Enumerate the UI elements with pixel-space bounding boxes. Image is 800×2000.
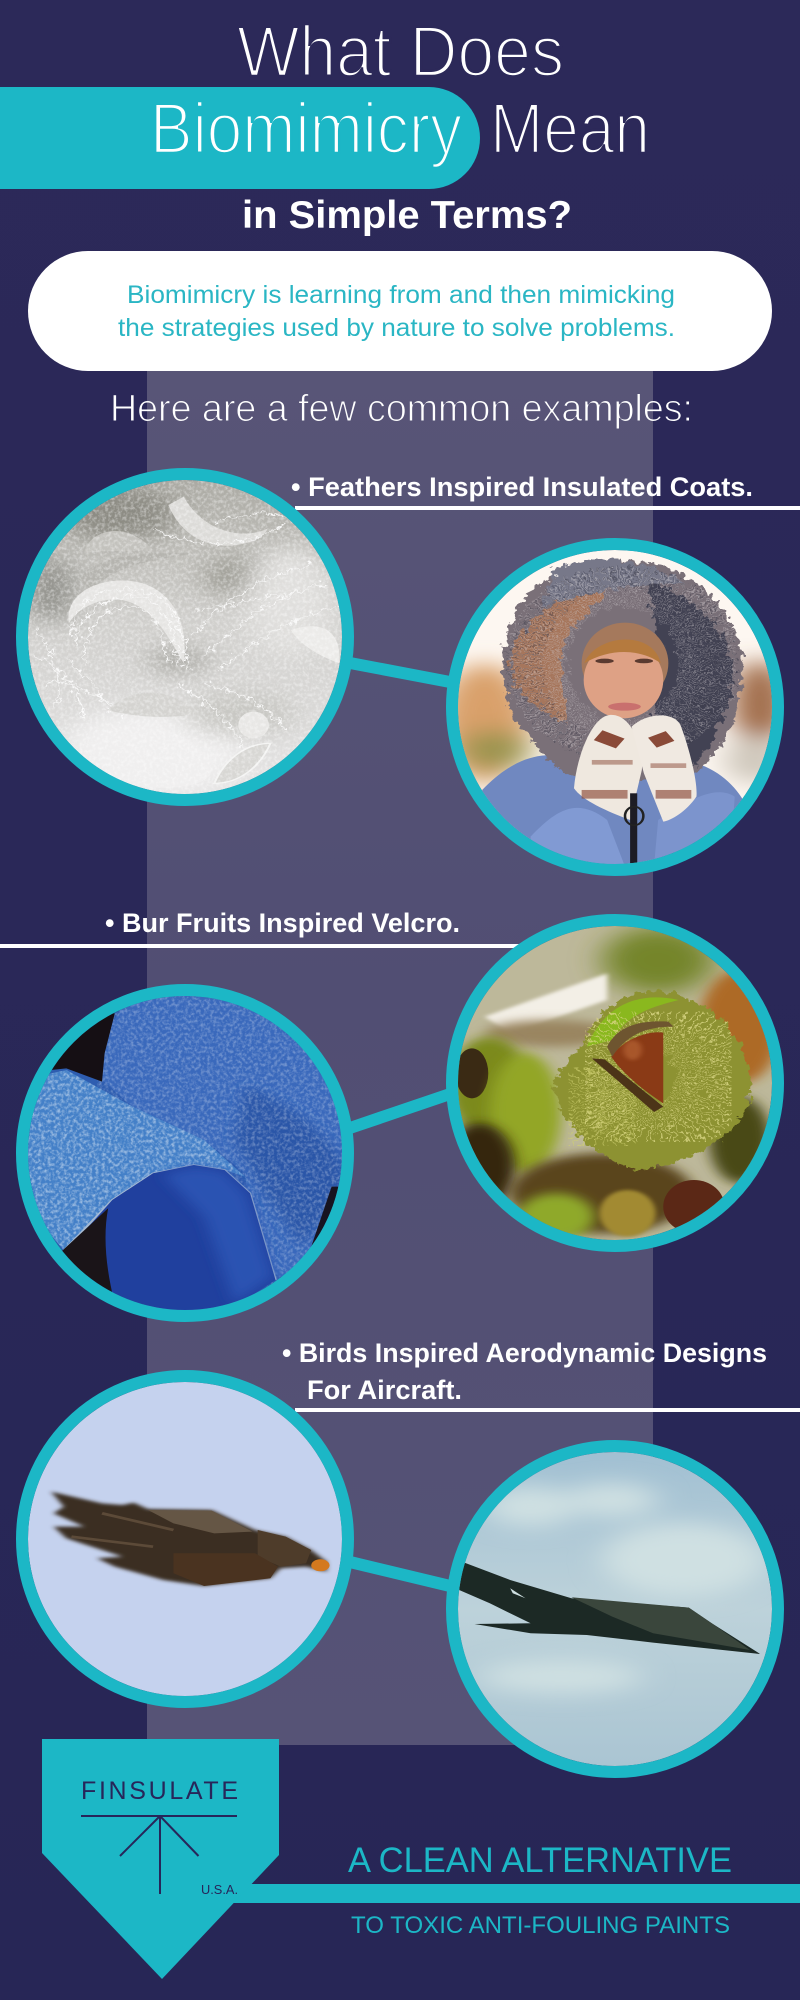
example 1 label: • Feathers Inspired Insulated Coats. [291,472,753,502]
photo: stealth aircraft [450,1445,780,1775]
hook side band [20,1070,245,1250]
definition text: Biomimicry is learning from and then mimicking [127,281,675,309]
nut [611,1032,663,1103]
definition text: the strategies used by nature to solve problems. [118,314,675,342]
example 2 label: • Bur Fruits Inspired Velcro. [105,908,460,938]
ring: chestnut photo [452,920,778,1246]
title highlight pill [0,87,480,189]
definition panel [28,251,772,371]
main bur [554,991,751,1170]
feather: upper left [84,531,153,553]
example 3 rule [295,1408,800,1412]
example 3 connector [350,1562,450,1586]
photo: chestnut burs [458,926,772,1240]
subtitle: in Simple Terms? [242,194,572,237]
definition text [118,281,675,342]
tagline secondary: TO TOXIC ANTI-FOULING PAINTS [351,1912,730,1939]
example 3 label: • Birds Inspired Aerodynamic Designs [282,1338,767,1368]
under side [90,1165,276,1310]
hat and face [582,622,668,683]
hood [503,560,742,779]
example 3 label: For Aircraft. [307,1375,462,1405]
intro line: Here are a few common examples: [110,388,693,430]
feather: plume [68,580,185,663]
example 3 label [282,1338,767,1405]
footer bar [225,1884,800,1903]
example 1 rule [295,506,800,510]
ring: feathers photo [22,474,348,800]
photo: bird in flight [20,1375,350,1705]
photo: fur-hooded coat [458,550,772,864]
side burs [449,1037,531,1137]
logo origin: U.S.A. [201,1883,238,1897]
tagline main: A CLEAN ALTERNATIVE [348,1841,732,1880]
feather: lower shapes [108,694,187,717]
example 1 connector [350,663,450,682]
feather: crescent [168,497,268,546]
ring: aircraft photo [452,1446,778,1772]
jet [459,1562,760,1654]
title: Biomimicry: Biomimicry [150,90,462,169]
fuzzy loop side [102,993,357,1283]
ring: bird photo [22,1376,348,1702]
central translucent panel [147,371,653,1745]
title: Mean: Mean [490,90,650,169]
logo badge [42,1739,279,1979]
ring: velcro photo [22,990,348,1316]
photo: blue velcro [28,996,342,1310]
shadow [62,1208,112,1292]
coat [482,755,742,864]
mittens [574,715,642,820]
logo arrow mark [81,1816,237,1894]
fur strands [536,587,709,740]
bur spikes [602,1027,714,1127]
ring: coat photo [452,544,778,870]
example 2 rule [0,944,525,948]
bird body [51,1492,327,1586]
dark gap [52,1013,115,1082]
photo: feathers [28,480,342,794]
logo wordmark: FINSULATE [81,1777,238,1805]
title: What Does: What Does [237,13,564,92]
example 2 connector [350,1094,450,1128]
